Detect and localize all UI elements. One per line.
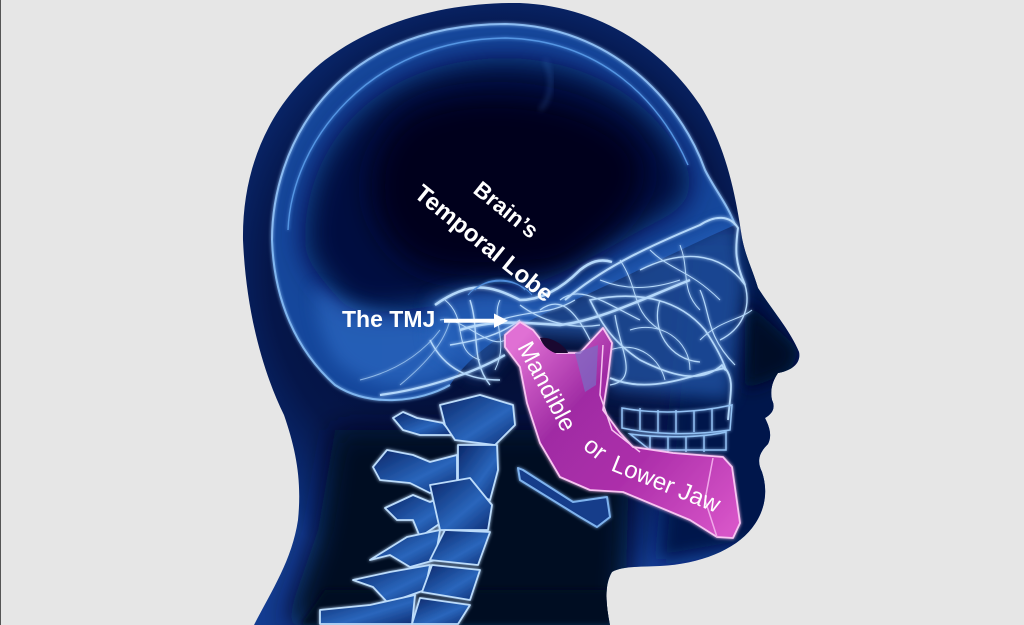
cervical spine bbox=[320, 395, 515, 624]
anatomical infographic bbox=[0, 0, 800, 625]
skull left mist bbox=[315, 285, 460, 386]
skull bbox=[272, 24, 735, 400]
head silhouette bbox=[243, 3, 799, 625]
skull base and facial bones bbox=[360, 218, 752, 420]
arrow: to the TMJ bbox=[444, 314, 508, 328]
lower neck shading bbox=[285, 430, 630, 625]
left border line bbox=[0, 0, 1, 625]
label: Mandible or Lower Jaw: or bbox=[578, 431, 612, 466]
lower neck base bbox=[300, 590, 612, 625]
face shading bbox=[660, 240, 800, 560]
label: Mandible or Lower Jaw: Lower Jaw bbox=[608, 451, 725, 519]
label: Mandible or Lower Jaw bbox=[512, 337, 725, 519]
skull rim lines bbox=[272, 24, 735, 240]
label: Brain's Temporal Lobe: Brain’s bbox=[469, 176, 543, 243]
label: The TMJ: The TMJ bbox=[342, 306, 435, 332]
upper and lower teeth bbox=[622, 405, 732, 452]
label: Brain's Temporal Lobe: Temporal Lobe bbox=[409, 180, 559, 308]
upper skull suture bbox=[540, 60, 550, 110]
label: Mandible or Lower Jaw: Mandible bbox=[512, 337, 581, 436]
hyoid bone bbox=[518, 468, 610, 527]
bright glow of skull base bbox=[430, 220, 745, 400]
mandible bbox=[505, 322, 740, 538]
